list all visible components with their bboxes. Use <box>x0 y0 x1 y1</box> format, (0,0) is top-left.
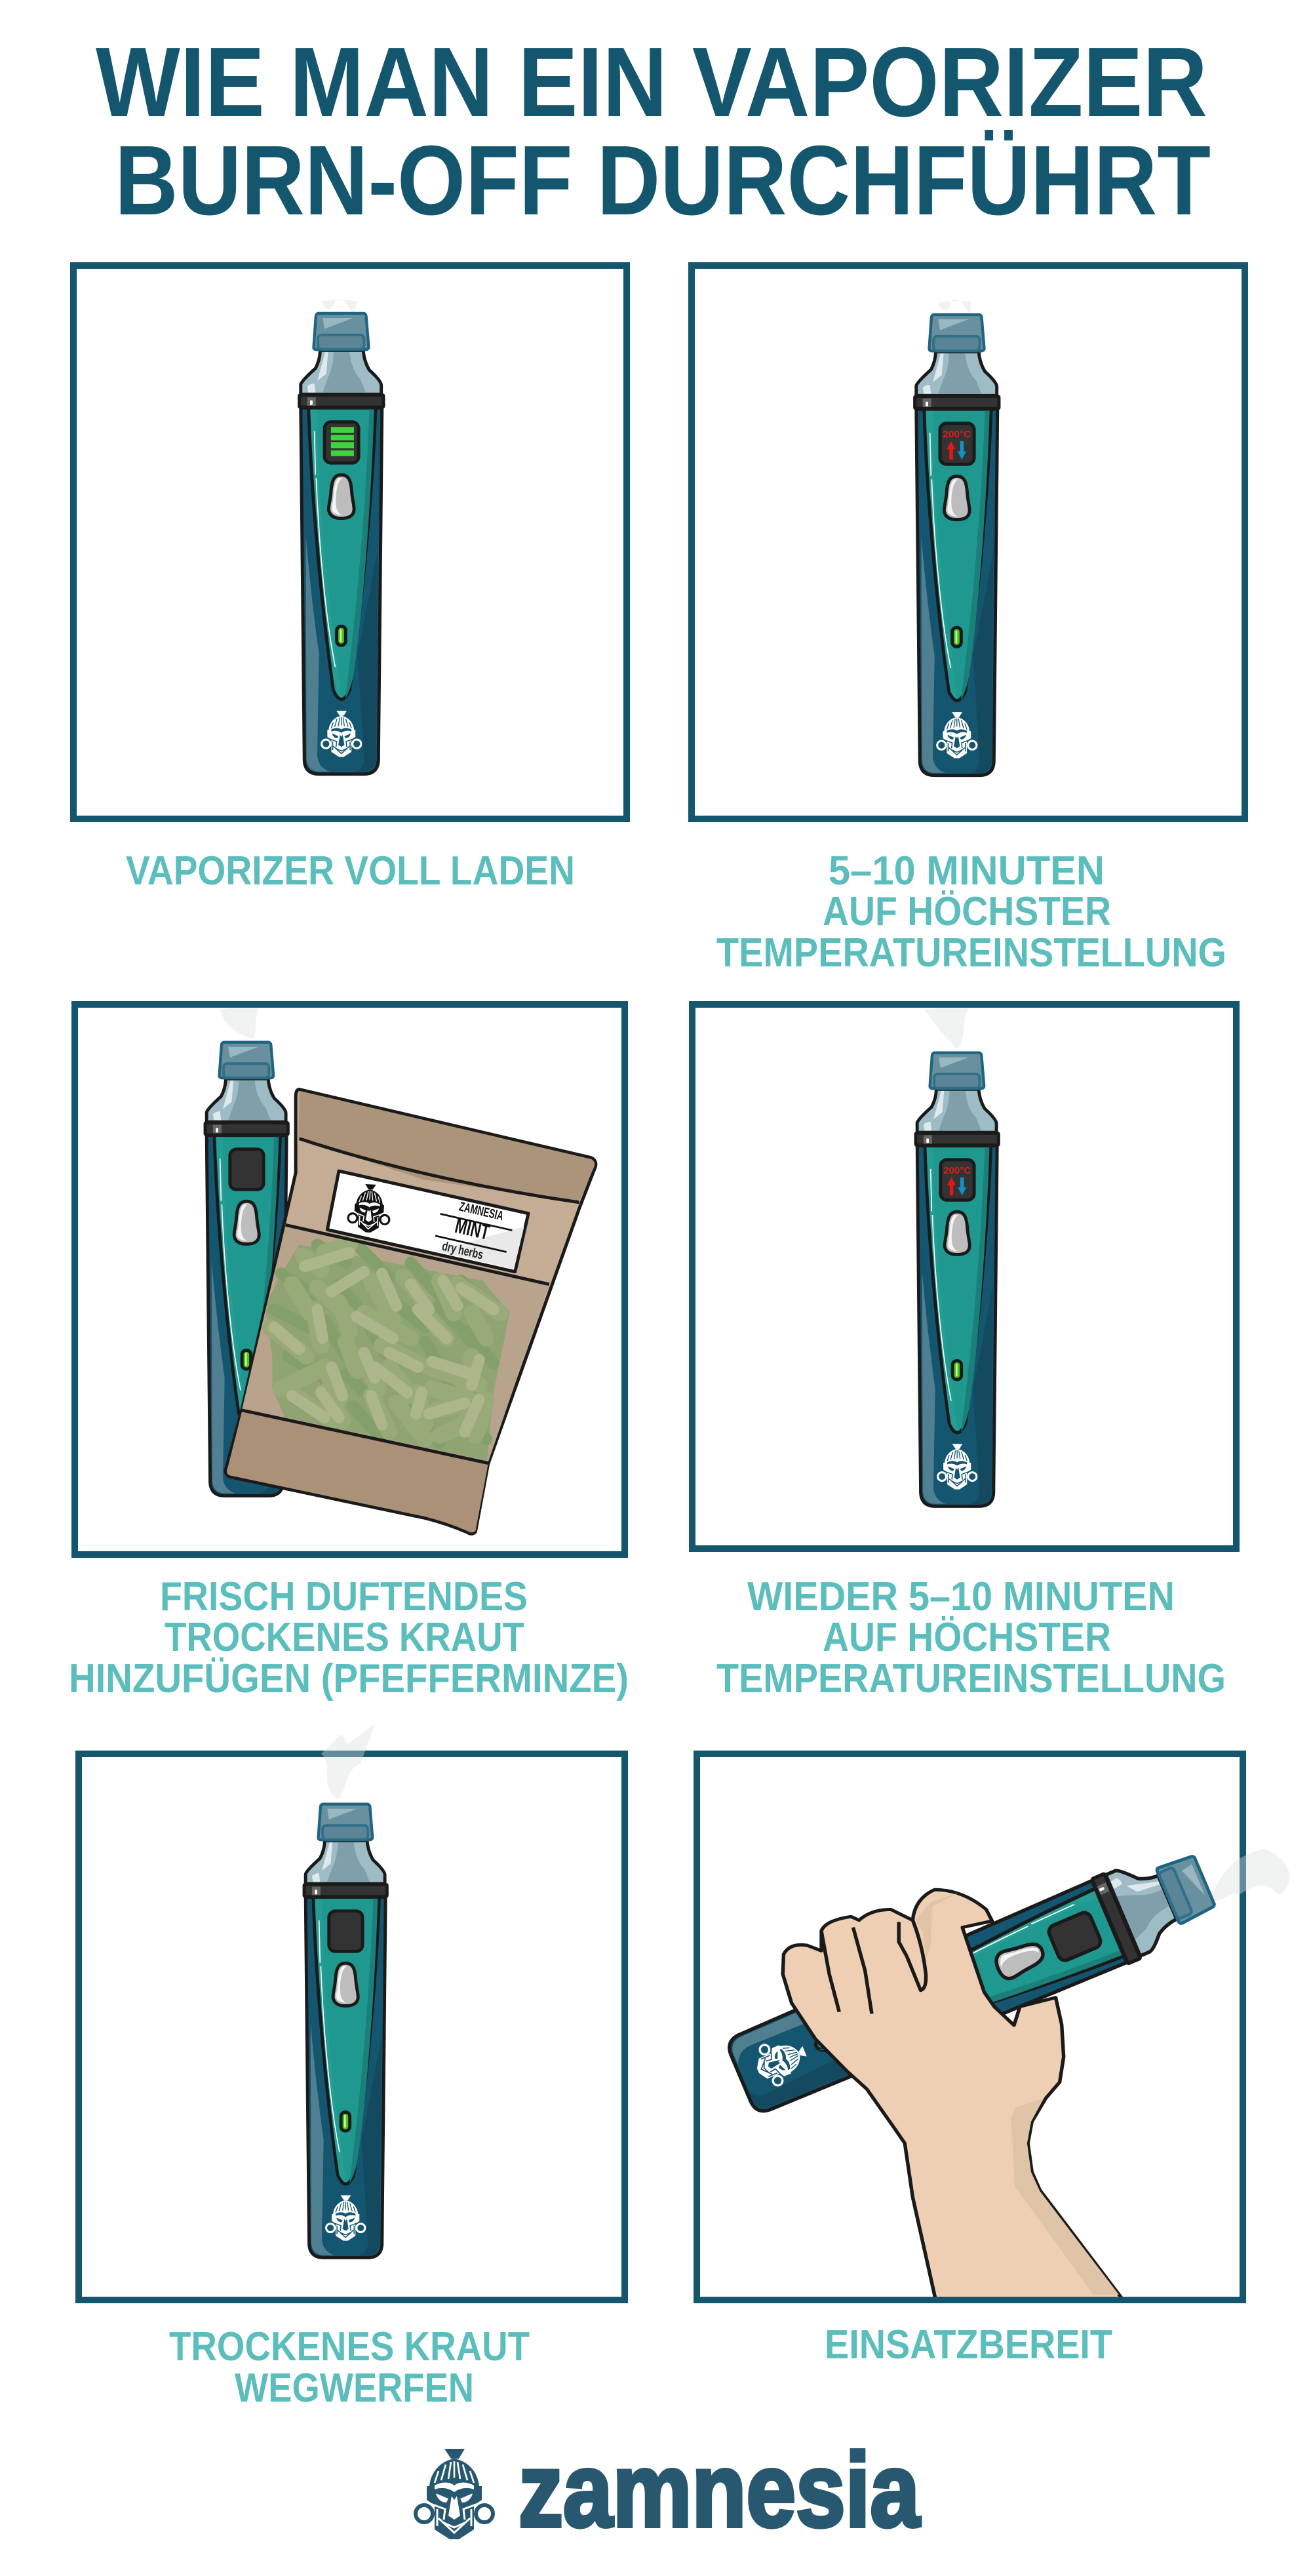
caption: frisch duftendes kraut: TROCKENES KRAUT <box>165 1614 524 1660</box>
caption: vaporizer voll laden: VAPORIZER VOLL LADEN <box>126 848 575 894</box>
herbs in window <box>265 1245 510 1461</box>
icon: hand <box>783 1890 1122 2299</box>
caption: wieder 5–10 minuten: AUF HÖCHSTER <box>823 1614 1111 1660</box>
caption: trockenes kraut wegwerfen: TROCKENES KRAUT <box>169 2324 530 2369</box>
panel: wieder 5–10 minuten <box>692 1004 1236 1549</box>
caption: frisch duftendes kraut: HINZUFÜGEN (PFEFFERMINZE) <box>69 1655 629 1701</box>
caption: wieder 5–10 minuten: WIEDER 5–10 MINUTEN <box>747 1574 1175 1619</box>
panel: trockenes kraut hinzufügen <box>75 1004 625 1555</box>
caption: wieder 5–10 minuten: TEMPERATUREINSTELLUNG <box>716 1655 1226 1701</box>
caption: wieder 5–10 minuten <box>716 1574 1226 1701</box>
logo: zamnesia: zamnesia <box>519 2431 920 2548</box>
icon: herb bag: ZAMNESIA <box>458 1199 505 1223</box>
icon: temperature display: 200°C <box>943 1166 971 1176</box>
panel: einsatzbereit <box>697 1754 1290 2303</box>
caption: frisch duftendes kraut: FRISCH DUFTENDES <box>160 1574 528 1619</box>
logo: zamnesia <box>416 2431 920 2548</box>
icon: herb bag <box>225 1090 596 1534</box>
smoke <box>1210 1849 1290 1901</box>
caption: 5–10 minuten: AUF HÖCHSTER <box>823 888 1111 934</box>
caption: 5–10 minuten: TEMPERATUREINSTELLUNG <box>716 930 1226 976</box>
icon: temperature display: 200°C <box>943 429 971 440</box>
caption: 5–10 minuten <box>716 848 1226 976</box>
caption: trockenes kraut wegwerfen <box>169 2324 530 2411</box>
title <box>96 26 1211 235</box>
icon: vaporizer in hand <box>723 1839 1223 2120</box>
caption: frisch duftendes kraut <box>69 1574 629 1701</box>
icon: full battery indicator <box>331 427 354 456</box>
icon: temperature display <box>943 1166 971 1195</box>
icon: temperature display <box>943 429 971 460</box>
panel: trockenes kraut wegwerfen <box>79 1724 625 2300</box>
panel: höchste temperatur <box>692 266 1245 819</box>
icon: herb bag: MINT <box>453 1213 492 1244</box>
caption: einsatzbereit: EINSATZBEREIT <box>825 2322 1112 2368</box>
caption: 5–10 minuten: 5–10 MINUTEN <box>829 848 1105 894</box>
icon: herb bag: dry herbs <box>440 1239 484 1263</box>
title: WIE MAN EIN VAPORIZER <box>96 26 1207 137</box>
caption: trockenes kraut wegwerfen: WEGWERFEN <box>235 2365 474 2411</box>
panel: vaporizer voll laden <box>73 266 627 819</box>
